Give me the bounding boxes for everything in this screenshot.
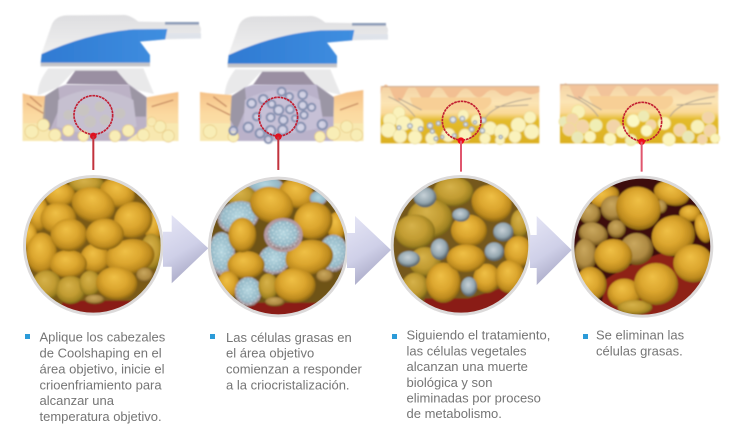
target marker step 1 bbox=[74, 96, 113, 170]
skin panel step 1 bbox=[23, 85, 178, 170]
bullet text step 2: a la criocristalización. bbox=[226, 378, 350, 392]
bullet text step 3 bbox=[392, 328, 550, 421]
bullet text step 1: Aplique los cabezales bbox=[40, 330, 166, 344]
skin panel step 4 bbox=[559, 83, 720, 172]
bullet marker 4 bbox=[583, 334, 588, 339]
target marker step 2 bbox=[259, 97, 298, 170]
bullet text step 4 bbox=[583, 328, 685, 358]
magnified circle step 2: fat cells starting to crystallize bbox=[207, 175, 350, 320]
skin panel step 3 bbox=[381, 85, 539, 172]
magnified circle step 3: fat cells dying bbox=[391, 175, 532, 317]
bullet text step 4: Se eliminan las bbox=[596, 328, 685, 342]
bullet text step 3: de metabolismo. bbox=[406, 406, 502, 421]
bullet text step 1: área objetivo, inicie el bbox=[40, 362, 165, 376]
magnified circle step 4: fat cells eliminated bbox=[571, 176, 715, 318]
bullet text step 4: células grasas. bbox=[596, 344, 683, 358]
bullet text step 3: biológica y son bbox=[406, 375, 492, 390]
skin panel step 2 bbox=[200, 85, 363, 170]
bullet text step 2: el área objetivo bbox=[226, 346, 314, 360]
bullet marker 3 bbox=[392, 334, 397, 339]
bullet marker 1 bbox=[25, 334, 30, 339]
device: applicator head step 2 bbox=[225, 16, 388, 96]
bullet text step 1: alcanzar una bbox=[40, 393, 115, 408]
device: applicator head step 1 bbox=[38, 15, 201, 95]
bullet text step 2: Las células grasas en bbox=[226, 330, 352, 345]
bullet text step 3: eliminadas por proceso bbox=[406, 390, 541, 406]
target marker step 4 bbox=[623, 102, 662, 172]
arrow 1 bbox=[163, 215, 208, 283]
bullet text step 1: temperatura objetivo. bbox=[40, 409, 162, 424]
arrow 3 bbox=[530, 216, 572, 285]
bullet text step 1: crioenfriamiento para bbox=[40, 378, 162, 392]
bullet text step 3: alcanzan una muerte bbox=[406, 359, 528, 374]
bullet text step 1 bbox=[25, 330, 166, 424]
magnified circle step 1: fat cells bbox=[23, 174, 164, 317]
bullet text step 3: las células vegetales bbox=[406, 344, 527, 358]
bullet text step 1: de Coolshaping en el bbox=[40, 346, 162, 360]
arrow 2 bbox=[347, 216, 391, 285]
bullet text step 2: comienzan a responder bbox=[226, 362, 363, 376]
bullet marker 2 bbox=[210, 334, 215, 339]
bullet text step 3: Siguiendo el tratamiento, bbox=[406, 328, 550, 342]
target marker step 3 bbox=[442, 101, 481, 172]
bullet text step 2 bbox=[210, 330, 363, 392]
